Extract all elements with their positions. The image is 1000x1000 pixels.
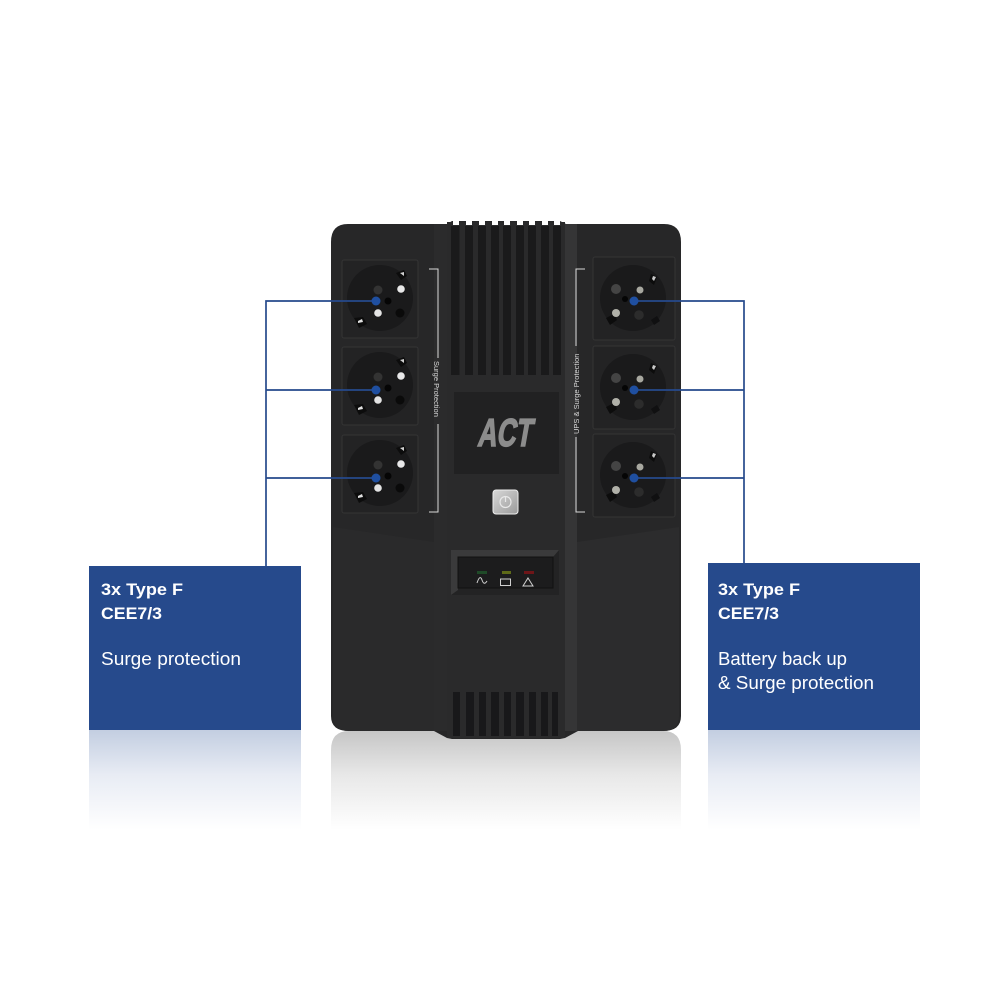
panel: left callout <box>89 566 301 730</box>
panel: right callout <box>708 563 920 730</box>
left outlets <box>342 260 418 513</box>
label: surge protection bracket: Surge Protection <box>432 361 441 417</box>
reflection: right box <box>708 730 920 830</box>
label: surge protection bracket <box>429 269 441 512</box>
text: right description line two: & Surge protection <box>718 673 874 693</box>
bottom vents <box>453 692 558 736</box>
power button <box>493 490 518 514</box>
body: lower left panel <box>333 527 434 731</box>
body: center column <box>447 222 565 738</box>
logo: ACT: ACT <box>475 411 537 455</box>
reflection: device <box>331 731 681 830</box>
heading: right standard: CEE7/3 <box>718 604 779 623</box>
label: UPS and surge protection bracket <box>572 269 585 512</box>
top vents <box>451 226 561 375</box>
callout lines: left <box>266 296 380 566</box>
body: lower right panel <box>577 527 679 731</box>
text: right description: Battery back up <box>718 649 847 669</box>
heading: right type: 3x Type F <box>718 580 800 599</box>
heading: left standard: CEE7/3 <box>101 604 162 623</box>
heading: left type: 3x Type F <box>101 580 183 599</box>
label: UPS and surge protection bracket: UPS & Surge Protection <box>572 354 581 434</box>
device: UPS body <box>331 219 681 739</box>
body: main shell <box>331 221 681 739</box>
callout lines: right <box>630 296 744 563</box>
body: column edge left <box>434 224 447 731</box>
body: column edge right <box>565 224 577 731</box>
reflection: left box <box>89 730 301 830</box>
top vent notches <box>453 219 560 225</box>
text: left description: Surge protection <box>101 649 241 669</box>
logo panel <box>454 392 559 474</box>
status panel <box>451 550 559 595</box>
right outlets <box>593 257 675 517</box>
